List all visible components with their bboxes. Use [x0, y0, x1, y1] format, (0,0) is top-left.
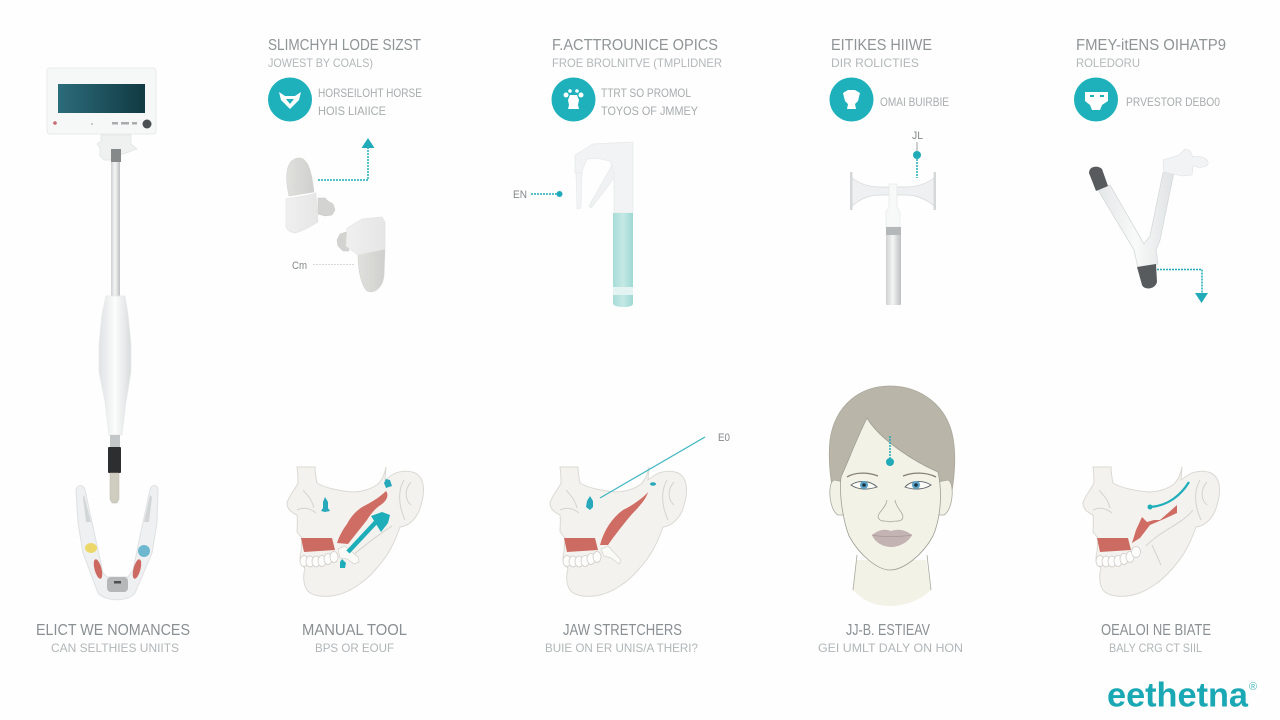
icon label: OMAI BUIRBIE — [880, 95, 949, 109]
teal marker — [586, 496, 593, 510]
muscle — [337, 491, 387, 544]
arrow up — [318, 138, 374, 180]
gum — [301, 538, 335, 552]
jaw outline — [287, 467, 423, 596]
caption: column 2: MANUAL TOOL — [302, 622, 407, 639]
icon label: PRVESTOR DEBO0 — [1126, 95, 1220, 109]
caption: column 3: BUIE ON ER UNIS/A THERI? — [545, 641, 698, 655]
plug one — [286, 158, 335, 233]
jaw outline — [1083, 467, 1219, 596]
illustration: jaw with callout line — [550, 467, 686, 596]
eyes — [851, 481, 931, 489]
arrow down — [1157, 270, 1208, 303]
monitor — [47, 68, 156, 134]
teal markers — [321, 497, 330, 512]
teal arrow — [340, 512, 390, 568]
icon label: TTRT SO PROMOL — [601, 86, 691, 100]
logo: ® — [1249, 681, 1257, 693]
tool: V-shaped jaw exerciser — [1089, 149, 1208, 303]
heading: EITIKES HIIWE — [831, 37, 932, 54]
gum — [564, 538, 598, 552]
subheading: JOWEST BY COALS) — [268, 56, 373, 70]
muscle — [1132, 505, 1177, 543]
teal curve — [1150, 482, 1189, 507]
callout line with label: E0 — [718, 432, 730, 444]
subheading: FROE BROLNITVE (TMPLIDNER — [552, 56, 722, 70]
lower jaw splint — [76, 486, 158, 600]
caption: column 4: JJ-B. ESTIEAV — [846, 622, 931, 639]
nozzle — [576, 173, 582, 209]
caption: column 3: JAW STRETCHERS — [563, 622, 682, 639]
illustration: jaw with arrow — [287, 467, 423, 596]
brows — [847, 473, 936, 477]
caption: column 1: ELICT WE NOMANCES — [36, 622, 190, 639]
head and stem — [575, 142, 633, 213]
grey end bottom — [1137, 264, 1157, 288]
heading: F.ACTTROUNICE OPICS — [552, 37, 718, 54]
ears — [830, 480, 846, 515]
illustration: front face — [829, 386, 955, 606]
heading: SLIMCHYH LODE SIZST — [268, 37, 421, 54]
jaw hinge bone — [338, 546, 359, 564]
tool: T-shaped horn stretcher — [850, 130, 936, 305]
grey end top — [1089, 167, 1108, 191]
handle — [99, 296, 131, 435]
jaw hinge bone — [601, 546, 621, 564]
panel: column 3 header: TOYOS OF JMMEY — [601, 104, 698, 118]
icon: teal circle with tree — [830, 78, 874, 122]
subheading: DIR ROLICTIES — [831, 56, 919, 70]
caption: column 2: BPS OR EOUF — [315, 641, 394, 655]
teeth — [1096, 546, 1140, 567]
face — [840, 418, 940, 570]
teal tube — [613, 213, 633, 307]
icon label: HORSEILOHT HORSE — [318, 86, 422, 100]
horns — [852, 178, 934, 206]
panel: column 4 header — [830, 37, 949, 122]
lips — [872, 530, 912, 547]
caption: column 5 — [1101, 622, 1211, 655]
trigger — [589, 165, 615, 208]
hair — [829, 386, 955, 497]
callout label — [513, 189, 562, 201]
pole — [111, 162, 120, 296]
icon: teal circle with figure — [552, 78, 596, 122]
cylinder — [886, 227, 901, 305]
nostril and ear detail — [1093, 480, 1207, 565]
nostril and ear detail — [560, 480, 674, 520]
caption: column 5: OEALOI NE BIATE — [1101, 622, 1211, 639]
teeth — [563, 552, 601, 567]
callout label: EN — [513, 189, 527, 201]
gum — [1097, 538, 1131, 552]
jaw outline — [550, 467, 686, 596]
callout: JL — [912, 130, 923, 142]
neck — [886, 184, 900, 227]
callout label: Cm — [292, 260, 307, 272]
caption: column 1 — [36, 622, 190, 655]
arms — [1098, 172, 1174, 268]
caption: column 4: GEI UMLT DALY ON HON — [818, 641, 963, 655]
device: electric unit with monitor — [47, 68, 158, 600]
panel: column 3 header — [552, 37, 722, 122]
subheading: ROLEDORU — [1076, 56, 1140, 70]
tool: ear-shaped bite plugs — [286, 138, 385, 292]
bracket — [97, 135, 137, 160]
logo: eethetna — [1107, 676, 1249, 714]
illustration: jaw with teal curve — [1083, 467, 1219, 596]
caption: column 2 — [302, 622, 407, 655]
heading: FMEY-itENS OIHATP9 — [1076, 37, 1226, 54]
callout line with label — [600, 432, 730, 498]
tool: spray applicator — [513, 142, 633, 307]
caption: column 3 — [545, 622, 698, 655]
black collar — [108, 447, 121, 473]
callout label — [292, 260, 355, 272]
caption: column 1: CAN SELTHIES UNIITS — [51, 641, 179, 655]
panel: column 2 header: HOIS LIAIICE — [318, 104, 386, 118]
muscle — [600, 492, 648, 545]
caption: column 5: BALY CRG CT SIIL — [1109, 641, 1202, 655]
caption: column 4 — [818, 622, 963, 655]
panel: column 5 header — [1074, 37, 1226, 122]
top cap — [1163, 149, 1208, 176]
nose — [878, 500, 903, 522]
teeth — [300, 552, 338, 567]
metal pin — [110, 473, 119, 503]
panel: column 2 header — [268, 37, 422, 122]
nostril and ear detail — [297, 480, 411, 556]
plug two — [337, 217, 385, 292]
neck — [853, 560, 931, 606]
icon: teal circle with device — [1074, 78, 1118, 122]
forehead marker — [886, 436, 894, 466]
icon: teal circle with mask — [268, 78, 312, 122]
callout — [912, 130, 923, 178]
